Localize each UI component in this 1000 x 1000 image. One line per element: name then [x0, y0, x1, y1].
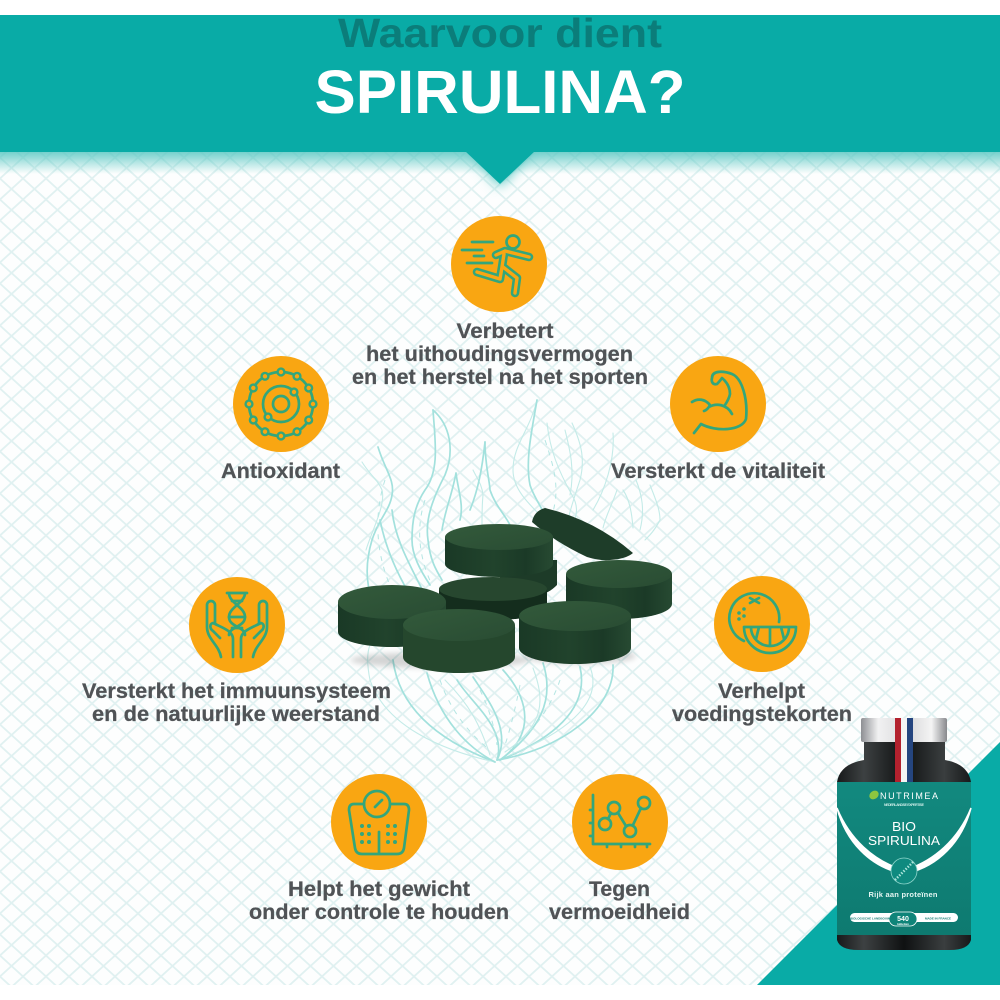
icon: atom ring — [233, 356, 329, 452]
benefit: uithoudingsvermogen — [352, 216, 648, 389]
label: vermoeidheid: Tegen — [589, 878, 650, 901]
label: voedingstekorten — [672, 680, 852, 726]
icon: runner — [451, 216, 547, 312]
tablet middle stack — [439, 577, 547, 620]
label: antioxidant: Antioxidant — [221, 460, 340, 483]
banner pointer — [465, 151, 535, 184]
header banner — [0, 15, 1000, 187]
icon: weighing scale — [331, 774, 427, 870]
spirulina tablets — [338, 508, 672, 673]
tablet right — [566, 560, 672, 619]
seaweed illustration — [362, 400, 660, 762]
brand tagline: NEDERLANDSE EXPERTISE — [884, 803, 925, 807]
benefit: immuunsysteem — [82, 577, 391, 726]
label: vermoeidheid: vermoeidheid — [549, 901, 690, 924]
label: uithoudingsvermogen: Verbetert — [456, 320, 554, 343]
benefit: gewicht — [249, 774, 509, 924]
label: voedingstekorten: Verhelpt — [718, 680, 805, 703]
benefit: vermoeidheid — [549, 774, 690, 924]
product name: BIO — [892, 819, 916, 834]
label emblem — [891, 858, 917, 884]
benefit: antioxidant — [221, 356, 340, 483]
label: voedingstekorten: voedingstekorten — [672, 703, 852, 726]
label: gewicht — [249, 878, 509, 924]
product badge strip: 540 — [897, 916, 909, 923]
label: gewicht: Helpt het gewicht — [288, 878, 470, 901]
flag ribbon — [895, 718, 913, 782]
tablet front right — [519, 601, 631, 664]
tablet hidden behind stack — [500, 560, 557, 594]
label: uithoudingsvermogen: en het herstel na het sporten — [352, 366, 648, 389]
product badge strip: BIOLOGISCHE LANDBOUW — [850, 916, 890, 920]
bottle cap — [861, 718, 947, 742]
icon: hands with DNA — [189, 577, 285, 673]
brand logo leaf — [868, 789, 880, 801]
product badge strip: tabletten — [897, 922, 909, 926]
tablet top stack — [445, 524, 553, 577]
product badge strip — [850, 912, 958, 926]
brand name: NUTRIMEA — [880, 791, 938, 801]
bottle label — [837, 782, 971, 935]
teal corner triangle — [757, 742, 1000, 985]
label: immuunsysteem: Versterkt het immuunsysteem — [82, 680, 391, 703]
label: vitaliteit: Versterkt de vitaliteit — [611, 460, 825, 483]
tablet tilted — [532, 508, 633, 560]
title line: SPIRULINA?: SPIRULINA? — [314, 58, 686, 126]
product name — [868, 819, 940, 848]
benefit: voedingstekorten — [672, 576, 852, 726]
title line: Waarvoor dient: Waarvoor dient — [338, 10, 662, 56]
label: vermoeidheid — [549, 878, 690, 924]
icon: line chart — [572, 774, 668, 870]
product name: SPIRULINA — [868, 833, 940, 848]
benefit: vitaliteit — [611, 356, 825, 483]
product bottle — [837, 718, 971, 950]
tablet shadows — [350, 652, 530, 668]
icon: orange fruit — [714, 576, 810, 672]
label: immuunsysteem: en de natuurlijke weerstand — [92, 703, 380, 726]
label: uithoudingsvermogen — [352, 320, 648, 389]
icon: flexed arm — [670, 356, 766, 452]
label: immuunsysteem — [82, 680, 391, 726]
label: uithoudingsvermogen: het uithoudingsvermogen — [366, 343, 633, 366]
label swoosh — [837, 808, 971, 873]
tablet left — [338, 585, 446, 647]
product badge strip: MADE IN FRANCE — [925, 916, 951, 920]
tablet front left — [403, 609, 515, 673]
bottle neck and shoulder — [837, 742, 971, 782]
bottle base — [837, 930, 971, 950]
label: gewicht: onder controle te houden — [249, 901, 509, 924]
product claim: Rijk aan proteïnen — [868, 890, 938, 899]
